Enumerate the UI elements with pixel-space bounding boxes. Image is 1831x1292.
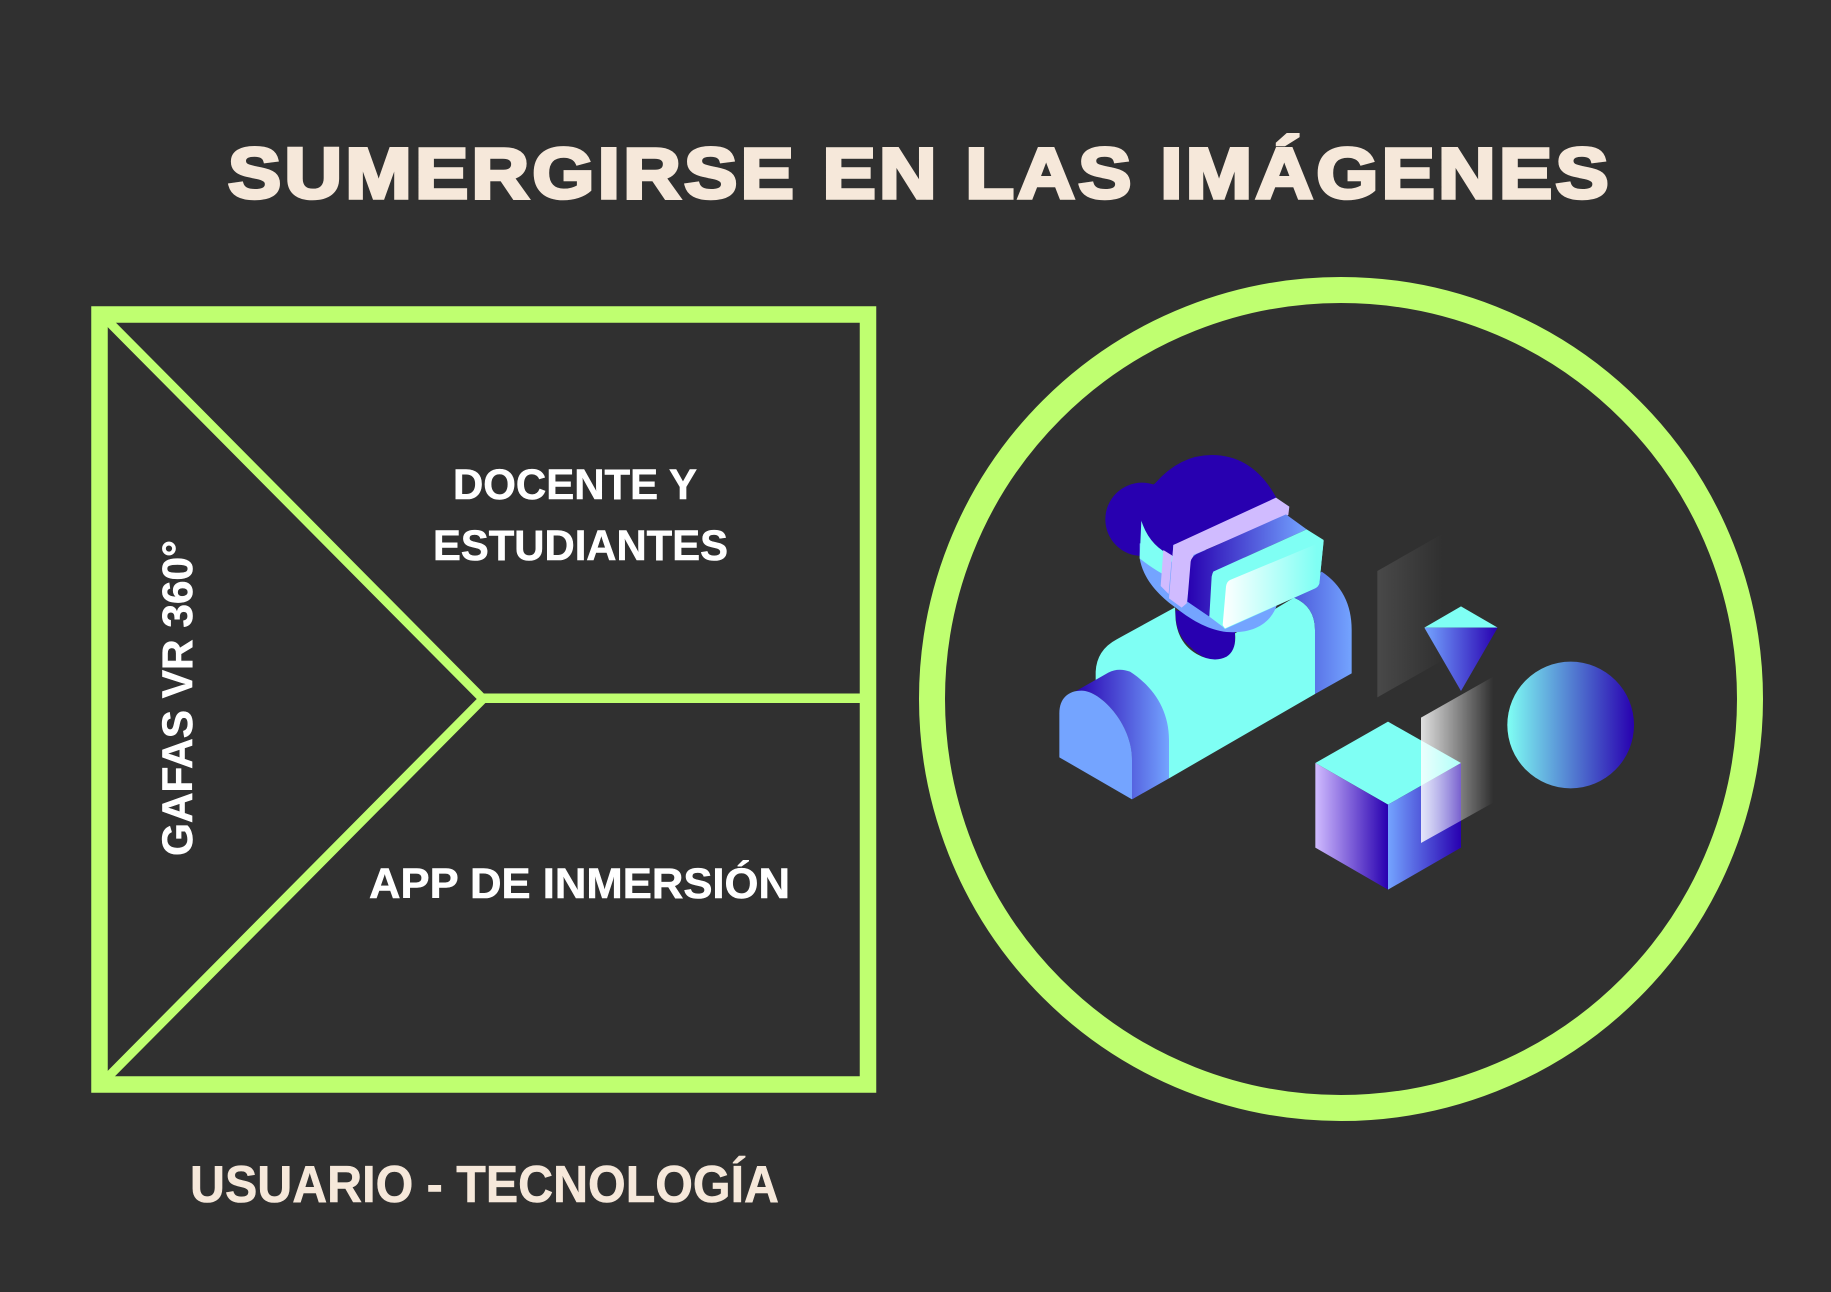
hair: [1137, 455, 1277, 556]
left arm side: [1075, 670, 1169, 799]
circle frame: [932, 290, 1750, 1108]
icon: person with VR headset: [1059, 455, 1352, 799]
horizontal divider: [482, 694, 863, 703]
skin: [1140, 521, 1177, 574]
front glass panel: [1421, 677, 1493, 843]
cube left face: [1315, 763, 1388, 890]
back glass panel: [1377, 533, 1443, 697]
cube top: [1315, 722, 1461, 805]
cube right face: [1388, 763, 1461, 890]
hair bun: [1105, 483, 1179, 556]
face: [1140, 543, 1277, 632]
headset body: [1187, 514, 1307, 617]
label: DOCENTE Y ESTUDIANTES: ESTUDIANTES: [433, 522, 728, 570]
label: DOCENTE Y ESTUDIANTES: DOCENTE Y: [453, 461, 697, 509]
headset strap: [1169, 498, 1289, 608]
strap side: [1161, 550, 1172, 594]
square frame: [100, 314, 868, 1084]
label: GAFAS VR 360°: GAFAS VR 360°: [154, 540, 202, 856]
diagonals: [100, 313, 483, 1085]
title: SUMERGIRSE EN LAS IMÁGENES: [228, 135, 1612, 214]
sphere: [1507, 662, 1634, 788]
icon: floating shapes: [1315, 533, 1634, 890]
torso: [1096, 598, 1315, 778]
gem top: [1424, 606, 1498, 628]
neck: [1176, 610, 1235, 661]
panel: diagram square: [100, 313, 868, 1085]
headset lens: [1223, 541, 1324, 628]
label: APP DE INMERSIÓN: APP DE INMERSIÓN: [369, 859, 790, 908]
gem body: [1424, 628, 1498, 691]
headset front: [1209, 529, 1324, 629]
caption: USUARIO - TECNOLOGÍA: [190, 1156, 779, 1214]
label: DOCENTE Y ESTUDIANTES: [433, 461, 728, 570]
right shoulder: [1294, 572, 1352, 694]
left arm front: [1059, 691, 1132, 799]
